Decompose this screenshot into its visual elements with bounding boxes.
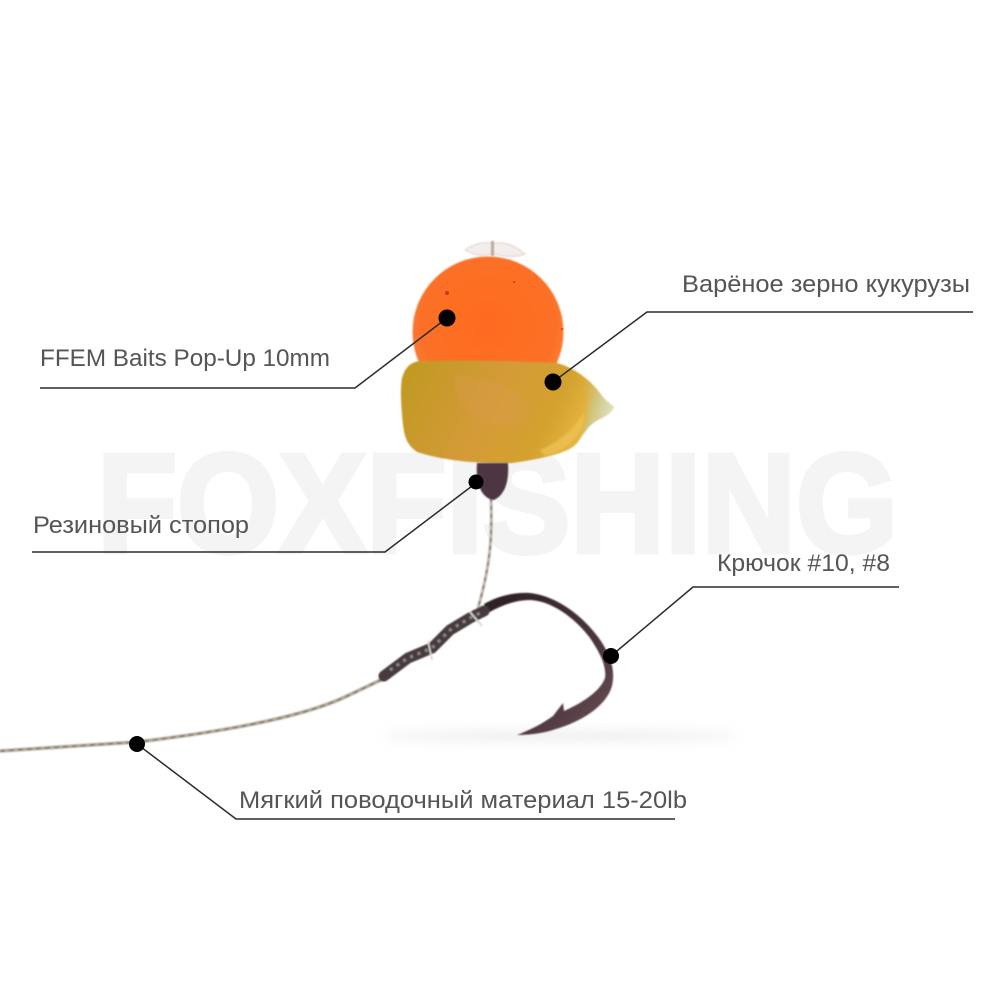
rubber stopper xyxy=(477,463,508,500)
watermark: FOXFISHING xyxy=(97,424,898,582)
callout: hook size: Крючок #10, #8 xyxy=(717,550,890,577)
callout: FFEM Baits Pop-Up xyxy=(40,310,456,388)
corn kernel xyxy=(401,361,614,463)
callout: boiled corn xyxy=(544,271,973,390)
callout: rubber stopper xyxy=(32,474,484,552)
callout: leader material: Мягкий поводочный материал 15-20lb xyxy=(239,787,687,814)
callout: boiled corn: Варёное зерно кукурузы xyxy=(682,271,970,298)
hook ground shadow xyxy=(380,732,740,740)
callout: FFEM Baits Pop-Up: FFEM Baits Pop-Up 10mm xyxy=(40,345,330,372)
callout: rubber stopper: Резиновый стопор xyxy=(33,512,249,539)
callout: hook size xyxy=(603,550,899,664)
hair stop xyxy=(465,241,525,256)
whipping knot xyxy=(384,611,484,676)
hook xyxy=(384,593,613,735)
fishing rig xyxy=(0,241,614,751)
callout: leader material xyxy=(129,736,687,819)
orange pop-up boilie xyxy=(411,256,565,364)
leader line xyxy=(0,498,491,751)
